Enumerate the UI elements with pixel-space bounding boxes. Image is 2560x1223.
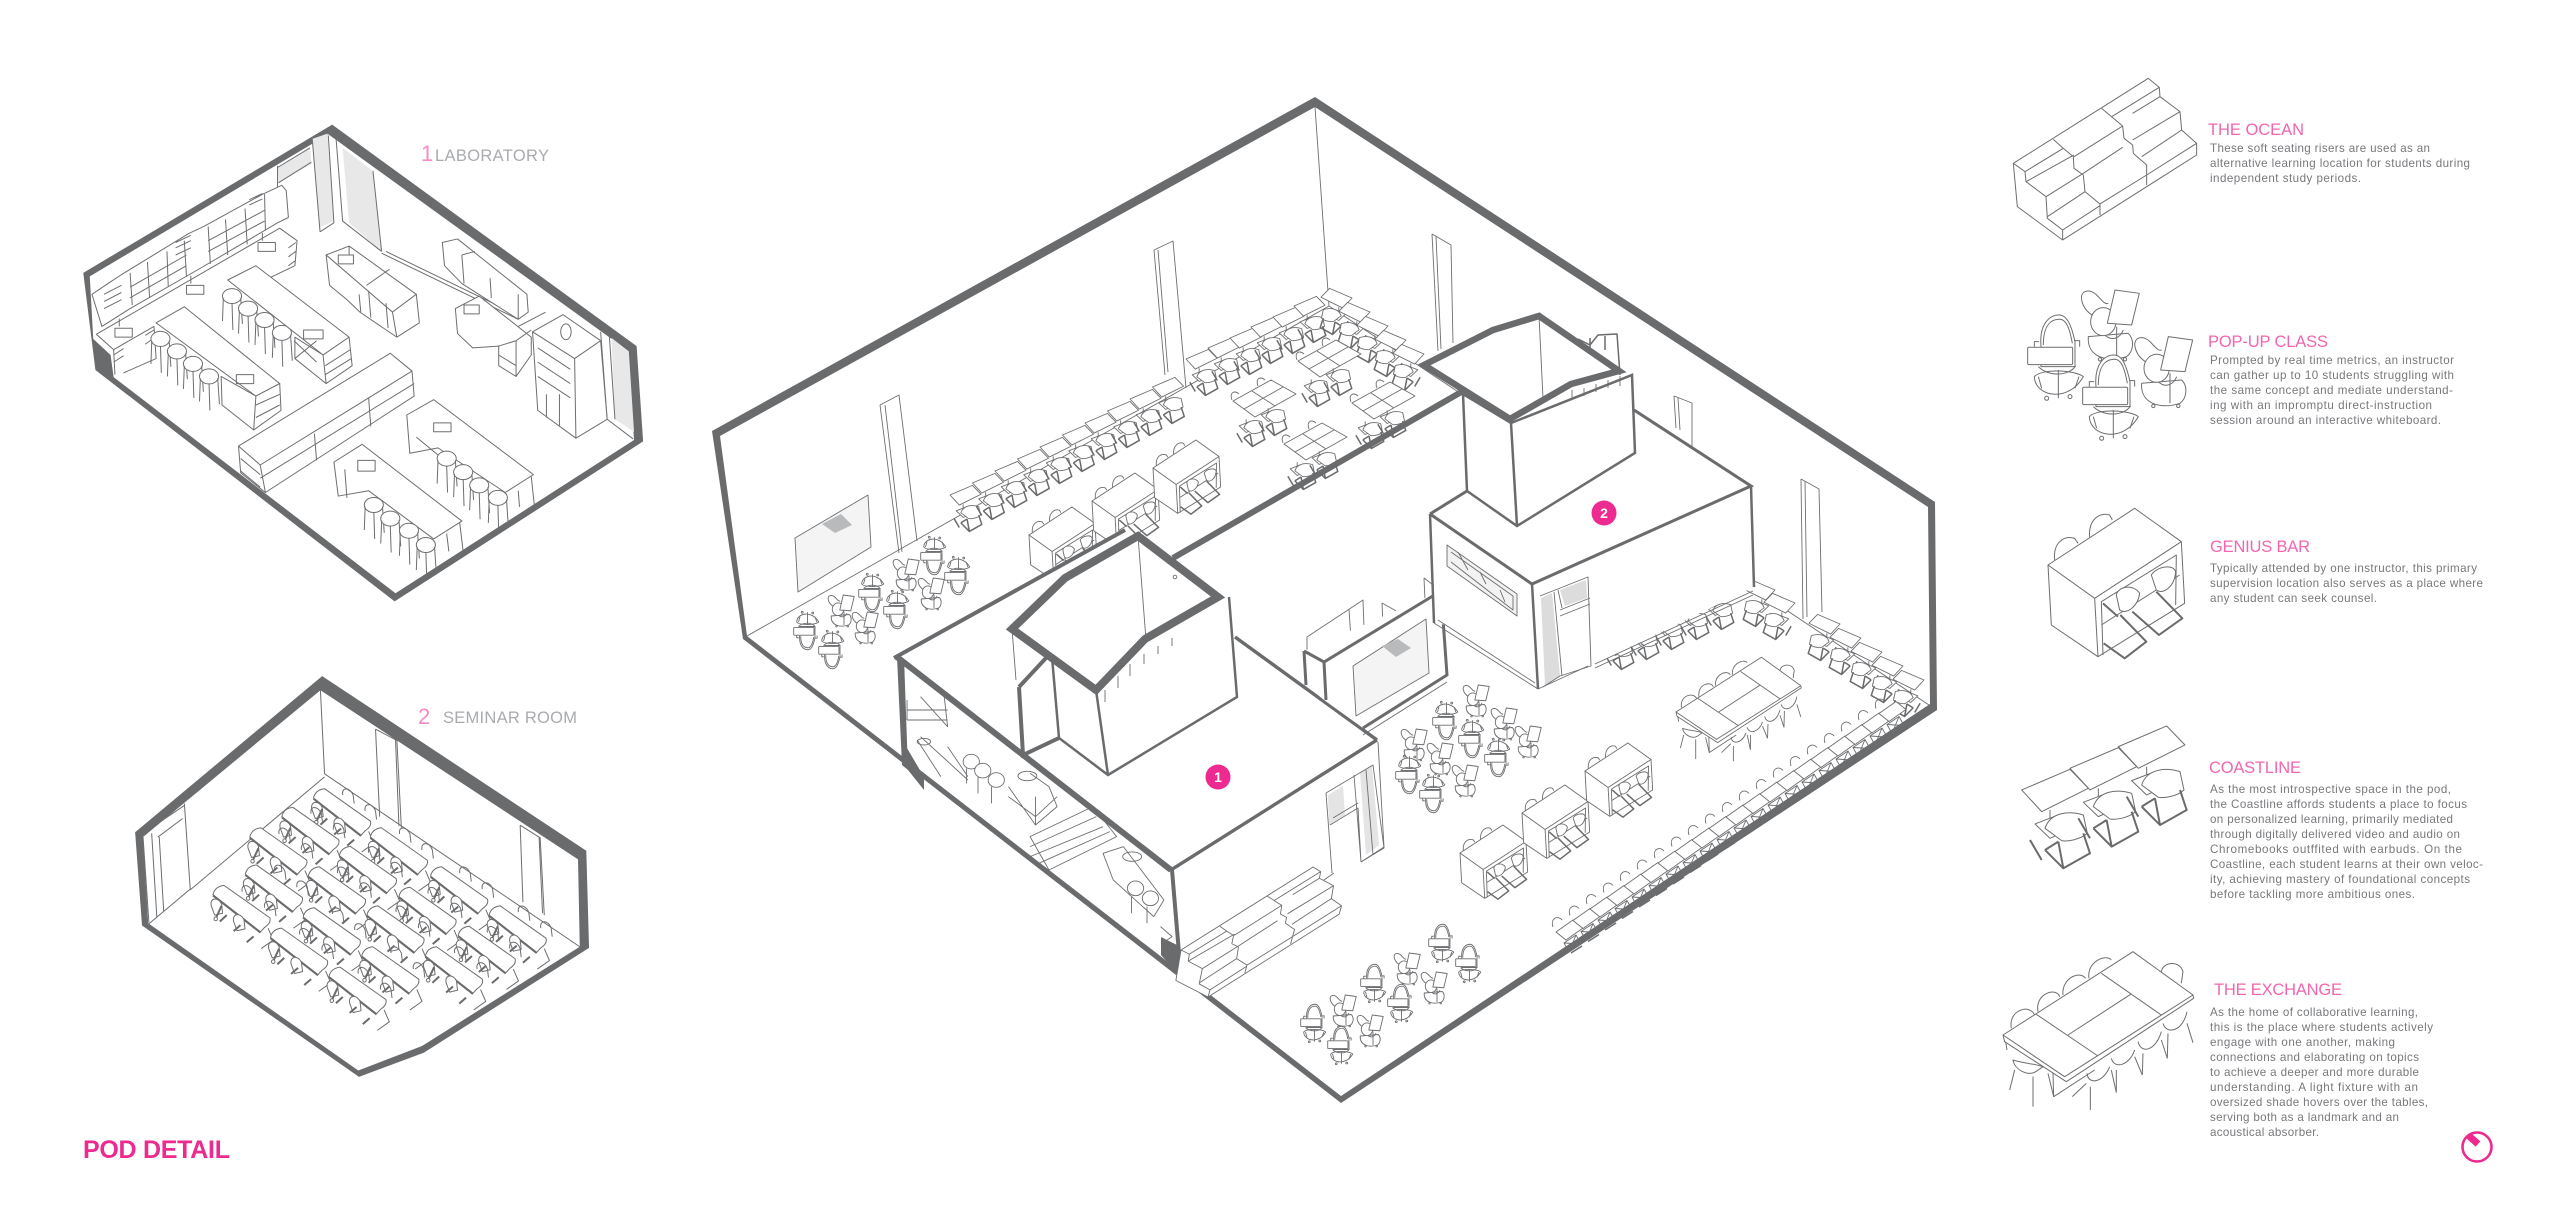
panel: coastline (2022, 726, 2483, 901)
text: the exchange description: to achieve a deeper and more durable (2210, 1066, 2419, 1079)
central whiteboard wall (1304, 578, 1447, 735)
text: coastline description: the Coastline affords students a place to focus (2210, 798, 2467, 811)
genius bars lower row (1460, 743, 1653, 899)
exchange table (1676, 657, 1801, 761)
coastline row bottom wall (1552, 699, 1906, 953)
text: the exchange description: engage with one another, making (2210, 1036, 2395, 1049)
text: genius bar description: any student can seek counsel. (2210, 592, 2377, 605)
pod 1 tower (1012, 536, 1237, 775)
text: coastline description: ity, achieving mastery of foundational concepts (2210, 873, 2470, 886)
text: the ocean description (2210, 142, 2470, 185)
text: genius bar description: Typically attended by one instructor, this primary (2210, 562, 2477, 575)
badge 1 (1206, 764, 1230, 790)
title: pod detail: POD DETAIL (83, 1136, 230, 1164)
panel: genius bar (2048, 508, 2483, 658)
panel: the ocean (2013, 78, 2470, 240)
text: the ocean description: alternative learning location for students during (2210, 157, 2470, 170)
lab islands bottom (334, 400, 534, 551)
label: seminar room (418, 704, 577, 729)
text: pop-up class description: can gather up to 10 students struggling with (2210, 369, 2454, 382)
heading: coastline: COASTLINE (2209, 759, 2301, 777)
genius bars upper row (1029, 440, 1221, 581)
laboratory windows and door (278, 134, 634, 439)
seminar walls (135, 676, 589, 1077)
pod 2 rail behind tower (1578, 334, 1620, 375)
text: pop-up class description: the same concept and mediate understand- (2210, 384, 2453, 397)
label: laboratory: LABORATORY (435, 147, 549, 165)
text: coastline description: Coastline, each student learns at their own veloc- (2210, 858, 2483, 871)
heading: genius bar: GENIUS BAR (2210, 538, 2310, 556)
text: coastline description: on personalized learning, primarily mediated (2210, 813, 2453, 826)
icon: soft seating risers (2013, 78, 2197, 240)
pop-up class cluster centre (1396, 685, 1541, 813)
lab stools row B (364, 451, 508, 579)
text: genius bar description: supervision location also serves as a place where (2210, 577, 2483, 590)
coastline row back wall (950, 296, 1326, 531)
pod 1 roof plane (897, 530, 1377, 870)
text: the exchange description: As the home of collaborative learning, (2210, 1006, 2418, 1019)
panel: laboratory plan (83, 125, 643, 601)
back wall shelving and counter (92, 185, 297, 375)
text: genius bar description (2210, 562, 2483, 605)
text: the exchange description: serving both as a landmark and an (2210, 1111, 2399, 1124)
heading: pop-up class: POP-UP CLASS (2208, 333, 2328, 351)
badge 2: 2 (1600, 505, 1608, 521)
icon: exchange table (2003, 952, 2194, 1110)
seminar tables (211, 789, 552, 1030)
text: coastline description: before tackling more ambitious ones. (2210, 888, 2415, 901)
pod 2 tower (1463, 375, 1635, 526)
lab island centre sink (326, 246, 419, 337)
floor lines and columns (747, 107, 1929, 705)
text: the ocean description: independent study periods. (2210, 172, 2361, 185)
icon: pink clock logo (2462, 1132, 2492, 1162)
text: pop-up class description: ing with an impromptu direct-instruction (2210, 399, 2432, 412)
lab stools row A (151, 289, 292, 410)
text: the exchange description: acoustical absorber. (2210, 1126, 2319, 1139)
coastline rows right wall (1743, 580, 1924, 716)
text: pop-up class description (2210, 354, 2454, 427)
thick wall between pods (1173, 391, 1463, 558)
text: the exchange description: oversized shade hovers over the tables, (2210, 1096, 2428, 1109)
seminar floor lines door and windows (143, 690, 580, 947)
pod 2 door (1540, 577, 1591, 687)
coastline row upper right (1320, 288, 1424, 390)
badge 2 (1592, 500, 1616, 526)
text: coastline description: Chromebooks outffited with earbuds. On the (2210, 843, 2462, 856)
icon: genius bar desk (2048, 508, 2185, 658)
pod 1 front wall (1171, 742, 1384, 977)
text: pop-up class description: session around an interactive whiteboard. (2210, 414, 2441, 427)
pop-up class cluster bottom (1301, 924, 1481, 1065)
pod 2 window (1447, 545, 1517, 616)
text: pop-up class description: Prompted by real time metrics, an instructor (2210, 354, 2454, 367)
text: coastline description (2210, 783, 2483, 901)
heading: the exchange: THE EXCHANGE (2214, 981, 2342, 999)
pop-up class cluster left (794, 536, 970, 669)
whiteboard back wall (795, 495, 871, 592)
label: laboratory (421, 141, 549, 166)
pod 2 (1424, 316, 1754, 689)
text: coastline description: As the most introspective space in the pod, (2210, 783, 2451, 796)
text: the ocean description: These soft seating risers are used as an (2210, 142, 2430, 155)
coastline row by pod 2 (1602, 583, 1734, 669)
lab tall unit (533, 315, 607, 438)
pod 1 outline edges (894, 530, 1125, 658)
label: seminar room: 2 (418, 704, 430, 729)
text: the exchange description (2210, 1006, 2433, 1139)
icon: pop-up chairs (2028, 290, 2193, 440)
text: the exchange description: connections and elaborating on topics (2210, 1051, 2419, 1064)
badge 1: 1 (1214, 769, 1222, 785)
text: coastline description: through digitally delivered video and audio on (2210, 828, 2460, 841)
soft seating risers (1166, 859, 1354, 1005)
lab seen through pod 1 (907, 697, 1172, 943)
panel: pop-up class (2028, 290, 2454, 440)
outer walls (712, 97, 1937, 1103)
panel: the exchange (2003, 952, 2433, 1139)
text: the exchange description: understanding. A light fixture with an (2210, 1081, 2418, 1094)
panel: seminar room plan (135, 676, 589, 1077)
pod 1 (894, 530, 1384, 977)
icon: coastline desks (2022, 726, 2187, 868)
lab island left (156, 266, 352, 430)
label: laboratory: 1 (421, 141, 433, 166)
lab centre shelf (239, 353, 414, 492)
left dark wall block of pod 1 (897, 657, 1181, 977)
panel: main isometric plan (712, 97, 1937, 1103)
heading: the ocean: THE OCEAN (2208, 121, 2304, 139)
laboratory walls (83, 125, 643, 601)
four-top tables (1231, 338, 1415, 489)
pod 1 door (1326, 765, 1384, 873)
label: seminar room: SEMINAR ROOM (443, 709, 577, 727)
pod 2 body walls (1430, 394, 1754, 689)
text: the exchange description: this is the place where students actively (2210, 1021, 2433, 1034)
lab right counter and cabinets (442, 239, 546, 376)
